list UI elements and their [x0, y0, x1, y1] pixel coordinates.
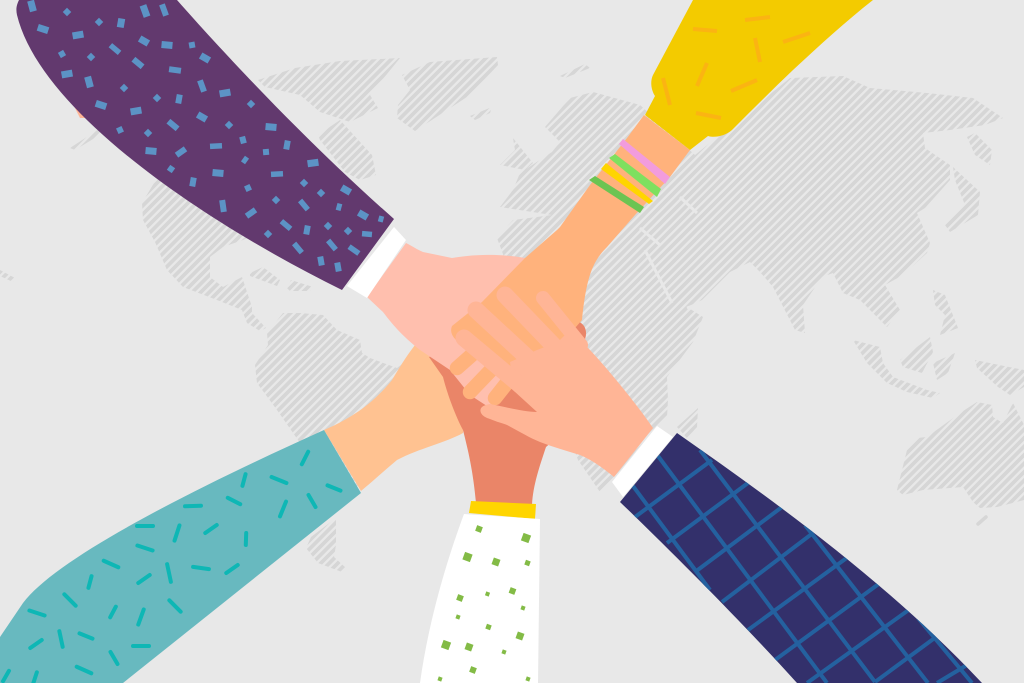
sleeve: navy with blue check: [620, 433, 982, 683]
cuff: yellow on white sleeve: [469, 501, 536, 519]
wristbands on orange arm: [589, 139, 670, 213]
sleeve: teal with dashes: [0, 430, 361, 683]
sleeve: purple with blue confetti: [16, 0, 394, 290]
world map: [0, 57, 1024, 572]
cuff: white on purple sleeve: [347, 227, 406, 298]
cuff: white on navy sleeve: [612, 426, 673, 497]
hand: brown, bottom: [429, 322, 600, 505]
sleeve: yellow with orange dashes: [645, 0, 873, 150]
sliver of hidden hand behind purple sleeve: [74, 106, 86, 118]
hand: peach, top of stack: [464, 295, 653, 477]
hand: light orange, lower left: [324, 345, 470, 491]
hand: orange, upper right: [451, 115, 690, 398]
hand: pink, upper left: [367, 243, 560, 408]
sleeve: white with green squares: [420, 514, 540, 683]
